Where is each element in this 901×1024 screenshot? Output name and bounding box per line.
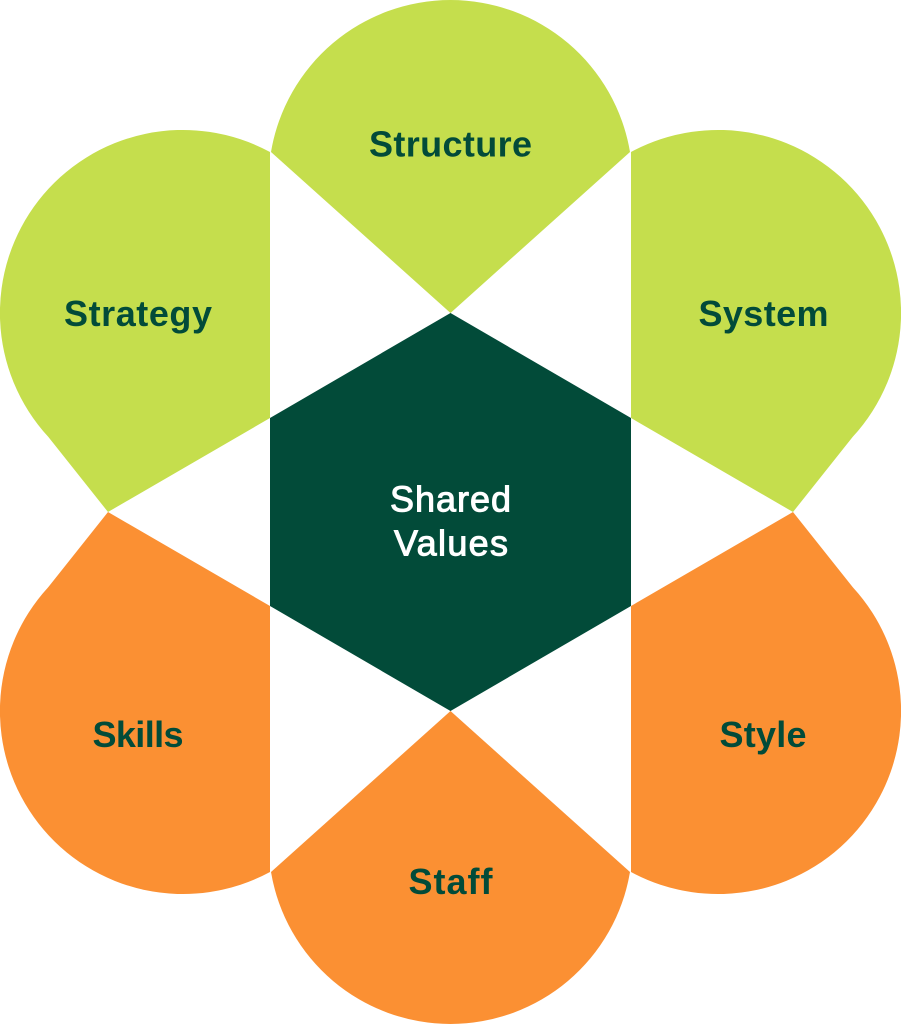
petal: Structure xyxy=(271,0,630,313)
center hexagon: Shared Values: Values xyxy=(394,522,508,564)
petal: Staff: Staff xyxy=(408,861,494,902)
petal: System xyxy=(631,130,901,512)
petal: Structure: Structure xyxy=(369,124,532,164)
petal: Skills xyxy=(0,512,270,894)
petal: Style xyxy=(631,512,901,894)
center hexagon: Shared Values: Shared xyxy=(390,478,511,520)
petal: Skills: Skills xyxy=(92,714,184,755)
center hexagon: Shared Values xyxy=(270,313,631,711)
petal: Strategy xyxy=(0,130,270,512)
petal: Staff xyxy=(271,711,630,1024)
petal: System: System xyxy=(698,293,828,334)
petal: Strategy: Strategy xyxy=(64,293,212,334)
petal: Style: Style xyxy=(720,714,806,755)
